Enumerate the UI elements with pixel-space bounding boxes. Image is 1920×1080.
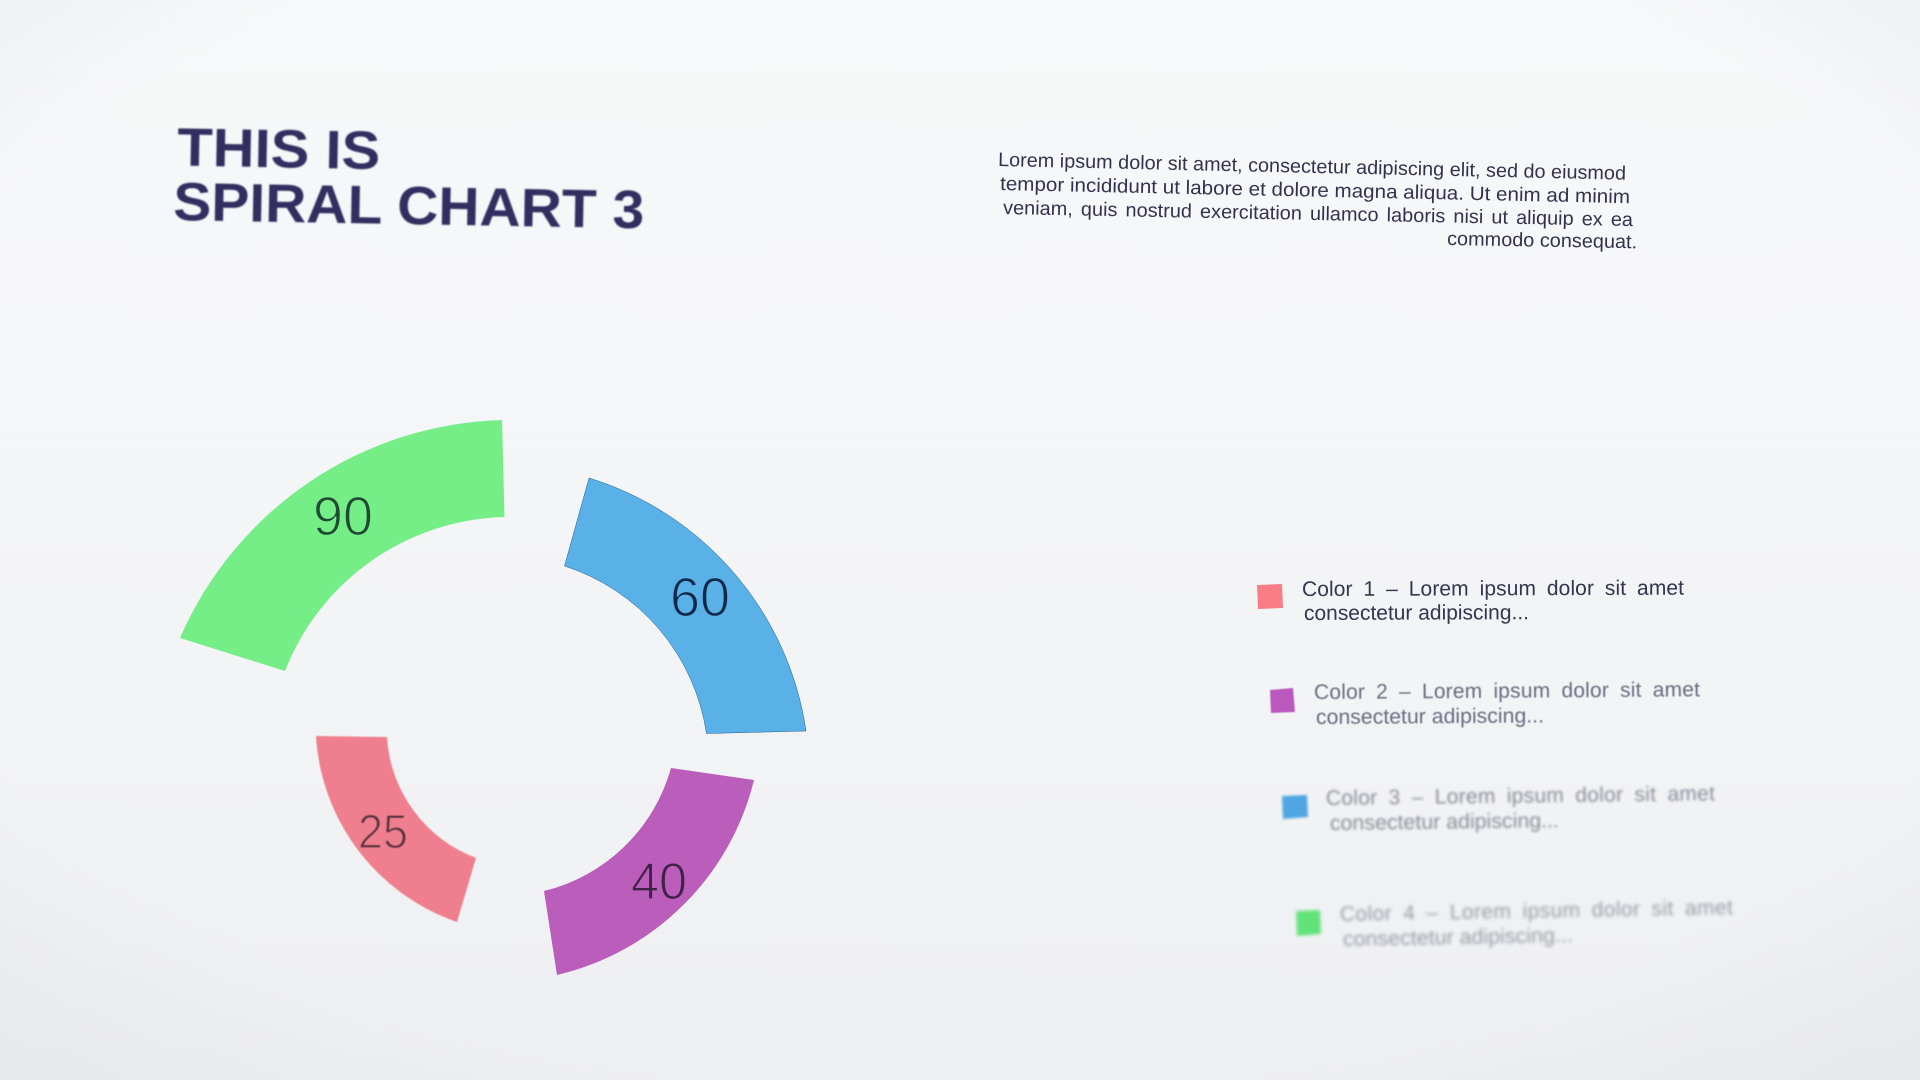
legend item: color 2: Color 2 – Lorem ipsum dolor sit amet (1314, 678, 1700, 704)
spiral chart (180, 420, 806, 975)
segment: purple 40 (544, 768, 754, 975)
segment: green 90 (180, 420, 504, 671)
legend item: color 2: consectetur adipiscing... (1316, 704, 1544, 729)
legend item: color 2 (1270, 678, 1700, 729)
legend item: color 3 (1282, 782, 1715, 835)
segment: purple 40: 40 (631, 853, 687, 911)
legend item: color 3: consectetur adipiscing... (1330, 809, 1559, 835)
legend item: color 1: Color 1 – Lorem ipsum dolor sit amet (1302, 577, 1684, 601)
description paragraph: commodo consequat. (1447, 228, 1637, 253)
legend item: color 4 (1296, 896, 1733, 951)
segment: pink 25: 25 (358, 806, 408, 859)
legend item: color 4: consectetur adipiscing... (1343, 924, 1573, 951)
segment: green 90: 90 (313, 485, 373, 547)
legend item: color 1: consectetur adipiscing... (1304, 601, 1529, 625)
legend (1257, 577, 1733, 951)
description paragraph: veniam, quis nostrud exercitation ullamco laboris nisi ut aliquip ex ea (1003, 197, 1633, 231)
legend item: color 1 (1257, 577, 1684, 625)
description paragraph: Lorem ipsum dolor sit amet, consectetur adipiscing elit, sed do eiusmod (998, 149, 1626, 185)
segment: pink 25 (316, 736, 476, 922)
title: SPIRAL CHART 3 (173, 172, 645, 240)
legend item: color 3: Color 3 – Lorem ipsum dolor sit amet (1326, 782, 1715, 810)
description paragraph: tempor incididunt ut labore et dolore magna aliqua. Ut enim ad minim (1000, 173, 1630, 208)
segment: blue 60: 60 (670, 566, 730, 628)
legend item: color 4: Color 4 – Lorem ipsum dolor sit amet (1340, 896, 1733, 926)
title: THIS IS (177, 118, 381, 181)
segment: blue 60 (564, 478, 806, 734)
title (173, 118, 645, 240)
description paragraph (998, 149, 1637, 253)
